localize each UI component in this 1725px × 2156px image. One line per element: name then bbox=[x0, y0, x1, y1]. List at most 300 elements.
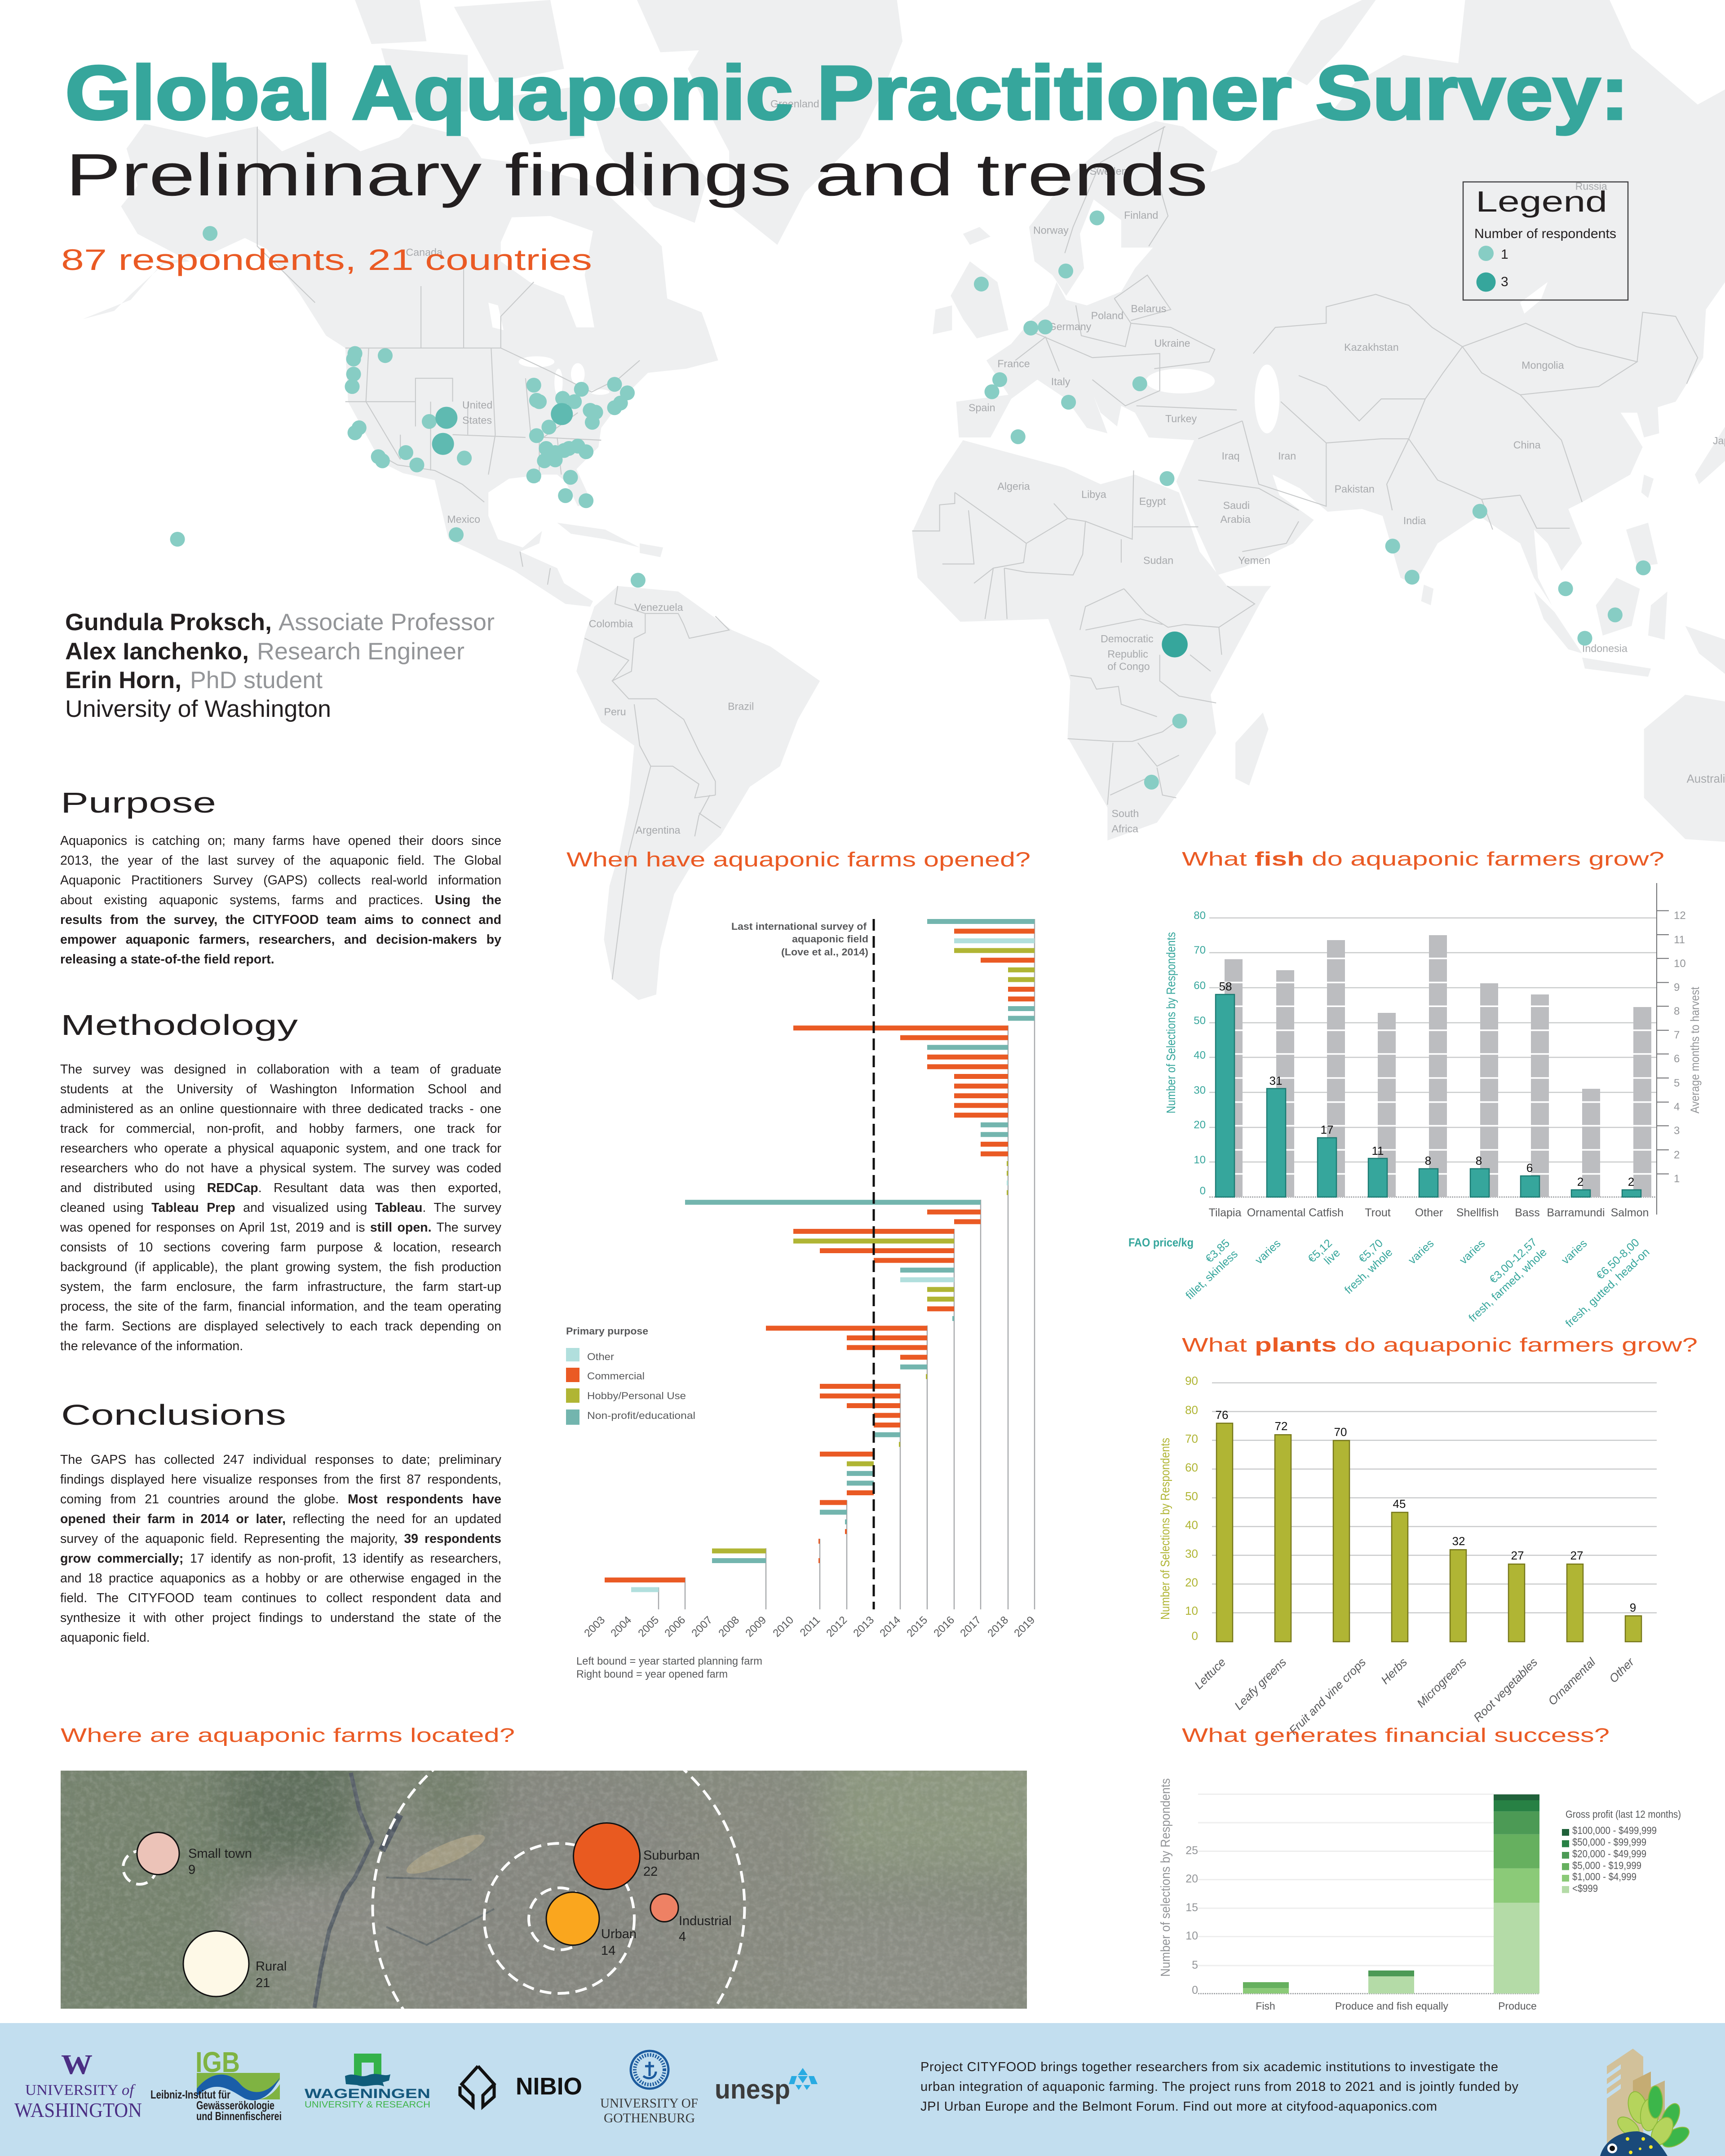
y axis: 90 bbox=[1185, 1374, 1198, 1387]
FAO price labels: fresh, whole bbox=[1342, 1246, 1395, 1296]
heading: purpose: Purpose bbox=[61, 786, 216, 819]
country borders bbox=[257, 127, 1698, 979]
year axis labels: 2016 bbox=[931, 1614, 957, 1639]
project description bbox=[920, 2060, 1518, 2114]
heading: conclusions: Conclusions bbox=[61, 1399, 286, 1431]
species labels: Trout bbox=[1365, 1206, 1391, 1219]
text block: methodology: the relevance of the information. bbox=[60, 1339, 243, 1353]
footer band bbox=[0, 2023, 1725, 2156]
text block: conclusions: findings displayed here visualize responses from the first 87 respondents, bbox=[60, 1472, 501, 1487]
profit legend bbox=[1562, 1808, 1681, 1894]
year axis labels: 2009 bbox=[743, 1614, 769, 1639]
right axis: 10 bbox=[1674, 958, 1686, 970]
map legend bbox=[1463, 182, 1628, 300]
project description: JPI Urban Europe and the Belmont Forum. Find out more at cityfood-aquaponics.com bbox=[920, 2099, 1437, 2114]
project description: urban integration of aquaponic farming. The project runs from 2018 to 2021 and is jointly funded by bbox=[920, 2080, 1518, 2094]
y axis: 10 bbox=[1185, 1930, 1198, 1942]
timeline legend: Primary purpose bbox=[566, 1325, 648, 1337]
profit legend: Gross profit (last 12 months) bbox=[1566, 1808, 1681, 1820]
logo: Wageningen bbox=[305, 2054, 430, 2110]
produce bar bbox=[1494, 1794, 1539, 1993]
water bodies bbox=[488, 216, 1548, 433]
logo: NIBIO: NIBIO bbox=[516, 2073, 582, 2100]
year axis labels: 2013 bbox=[851, 1614, 876, 1639]
left axis: 40 bbox=[1194, 1049, 1206, 1061]
authors: Gundula Proksch, bbox=[65, 609, 272, 636]
text block: conclusions: coming from 21 countries around the globe. Most respondents have bbox=[60, 1492, 501, 1507]
year axis labels: 2019 bbox=[1012, 1614, 1037, 1639]
location labels: Suburban bbox=[643, 1848, 700, 1863]
country labels bbox=[406, 98, 1725, 836]
category labels bbox=[1256, 2000, 1537, 2012]
species labels: Salmon bbox=[1611, 1206, 1649, 1219]
category labels: Produce bbox=[1498, 2000, 1537, 2012]
country labels: Venezuela bbox=[634, 601, 683, 613]
respondent points, 1 respondent bbox=[170, 211, 1651, 790]
y axis: 40 bbox=[1185, 1518, 1198, 1532]
location labels: 4 bbox=[679, 1930, 686, 1944]
world map background bbox=[83, 0, 1725, 1000]
country labels: Canada bbox=[406, 247, 442, 258]
logo: University of Washington bbox=[14, 2050, 142, 2121]
profit legend: $5,000 - $19,999 bbox=[1572, 1860, 1641, 1871]
logo: unesp: unesp bbox=[715, 2074, 790, 2104]
species labels: Ornamental bbox=[1247, 1206, 1305, 1219]
land masses bbox=[83, 0, 1725, 1000]
plant count bars bbox=[1216, 1423, 1641, 1642]
text block: conclusions: field. The CITYFOOD team continues to collect respondent data and bbox=[60, 1591, 501, 1605]
heading: financial success: What generates financial success? bbox=[1182, 1724, 1610, 1746]
text block: methodology: researchers who do not have a physical system. The survey was coded bbox=[60, 1161, 501, 1175]
y axis: Number of Selections by Respondents bbox=[1158, 1438, 1172, 1620]
timeline note: Left bound = year started planning farm bbox=[576, 1655, 762, 1667]
right axis: 3 bbox=[1674, 1125, 1680, 1137]
dashed city rings bbox=[122, 1771, 746, 2009]
category labels: Produce and fish equally bbox=[1335, 2000, 1448, 2012]
heading: fish: What fish do aquaponic farmers grow? bbox=[1182, 848, 1664, 870]
left axis: 80 bbox=[1194, 910, 1206, 922]
country labels: Poland bbox=[1091, 309, 1123, 321]
location labels: 21 bbox=[256, 1976, 270, 1990]
right axis: 6 bbox=[1674, 1053, 1680, 1065]
grid lines bbox=[1198, 1794, 1539, 1966]
year axis labels: 2004 bbox=[608, 1614, 634, 1639]
respondent points, larger bbox=[432, 403, 573, 455]
authors: University of Washington bbox=[65, 696, 331, 722]
text block: purpose: releasing a state-of-the field report. bbox=[60, 952, 274, 967]
FAO price labels: live bbox=[1322, 1246, 1343, 1267]
bar values: 9 bbox=[1630, 1601, 1636, 1614]
species labels: Other bbox=[1415, 1206, 1443, 1219]
right axis: Average months to harvest bbox=[1688, 987, 1702, 1113]
FAO price labels: €3,85 bbox=[1203, 1237, 1232, 1265]
right axis: 4 bbox=[1674, 1101, 1680, 1113]
left axis: 10 bbox=[1194, 1154, 1206, 1166]
country labels: Arabia bbox=[1220, 513, 1251, 525]
text block: purpose bbox=[60, 831, 501, 969]
map legend: 1 bbox=[1501, 247, 1508, 262]
plant labels: Root vegetables bbox=[1471, 1655, 1540, 1724]
FAO price labels: varies bbox=[1457, 1237, 1487, 1267]
bar values: 11 bbox=[1372, 1144, 1384, 1158]
plant labels: Ornamental bbox=[1545, 1655, 1598, 1708]
text block: methodology: background (if applicable), the plant growing system, the fish production bbox=[60, 1260, 501, 1274]
FAO price labels: €6,50-8,00 bbox=[1594, 1236, 1642, 1282]
country labels: Germany bbox=[1048, 321, 1092, 332]
right axis: 1 bbox=[1674, 1173, 1680, 1185]
y axis: Number of selections by Respondents bbox=[1159, 1778, 1173, 1977]
respondents summary: 87 respondents, 21 countries bbox=[61, 243, 592, 276]
profit legend: $100,000 - $499,999 bbox=[1572, 1825, 1657, 1836]
text block: purpose: results from the survey, the CITYFOOD team aims to connect and bbox=[60, 913, 501, 927]
financial chart bbox=[1159, 1778, 1681, 2012]
year axis labels: 2011 bbox=[798, 1614, 823, 1639]
text block: methodology: The survey was designed in collaboration with a team of graduate bbox=[60, 1062, 501, 1077]
location labels bbox=[188, 1847, 732, 1990]
logo: University of Washington: W bbox=[61, 2050, 93, 2080]
bar values: 2 bbox=[1577, 1175, 1583, 1188]
logo: IGB: Leibniz-Institut für bbox=[150, 2088, 230, 2101]
country labels: France bbox=[997, 358, 1030, 370]
map legend: 3 bbox=[1501, 274, 1508, 289]
right axis: 2 bbox=[1674, 1149, 1680, 1161]
location labels: Industrial bbox=[679, 1914, 732, 1928]
timeline legend: Commercial bbox=[587, 1370, 645, 1382]
plant labels: Microgreens bbox=[1414, 1655, 1469, 1710]
grid lines bbox=[1209, 918, 1657, 1162]
bar values: 45 bbox=[1393, 1497, 1406, 1511]
FAO price labels: €5,70 bbox=[1356, 1237, 1385, 1265]
text block: conclusions: survey of the aquaponic field. Representing the majority, 39 respondents bbox=[60, 1532, 501, 1546]
timeline legend bbox=[566, 1325, 695, 1425]
text block: conclusions: aquaponic field. bbox=[60, 1630, 150, 1645]
plant labels: Lettuce bbox=[1192, 1655, 1228, 1692]
logo: IGB bbox=[150, 2046, 282, 2123]
y axis bbox=[1158, 1374, 1198, 1643]
FAO price labels: FAO price/kg bbox=[1128, 1236, 1194, 1249]
left axis: 20 bbox=[1194, 1119, 1206, 1131]
country labels: United bbox=[462, 399, 492, 411]
country labels: South bbox=[1111, 808, 1139, 819]
location labels: Urban bbox=[601, 1927, 637, 1941]
country labels: States bbox=[462, 414, 492, 426]
location labels: 9 bbox=[188, 1863, 195, 1877]
plant labels bbox=[1192, 1655, 1637, 1737]
bar values: 31 bbox=[1269, 1074, 1282, 1087]
text block: purpose: 2013, the year of the last survey of the aquaponic field. The Global bbox=[60, 853, 501, 868]
timeline legend: Other bbox=[587, 1351, 614, 1362]
text block: conclusions: The GAPS has collected 247 individual responses to date; preliminary bbox=[60, 1453, 501, 1467]
text block: methodology: and distributed using REDCap. Resultant data was then exported, bbox=[60, 1181, 501, 1195]
bar values: 27 bbox=[1570, 1549, 1583, 1562]
left axis: 70 bbox=[1194, 944, 1206, 956]
logo: CITYFOOD fish and buildings bbox=[1600, 2049, 1692, 2156]
produce and fish bar bbox=[1368, 1970, 1414, 1993]
grid lines bbox=[1212, 1383, 1657, 1613]
location labels: 22 bbox=[643, 1864, 658, 1879]
authors bbox=[65, 609, 495, 722]
left axis: 30 bbox=[1194, 1084, 1206, 1096]
text block: purpose: empower aquaponic farmers, researchers, and decision-makers by bbox=[60, 932, 501, 947]
timeline bars bbox=[605, 919, 1035, 1592]
country labels: Colombia bbox=[589, 618, 633, 629]
bar values: 72 bbox=[1275, 1419, 1287, 1433]
bar values: 17 bbox=[1321, 1123, 1333, 1136]
logo: University of Gothenburg: GOTHENBURG bbox=[604, 2111, 695, 2125]
right axis: 9 bbox=[1674, 981, 1680, 994]
species labels: Shellfish bbox=[1456, 1206, 1499, 1219]
map legend: Number of respondents bbox=[1474, 226, 1616, 241]
left axis: Number of Selections by Respondents bbox=[1164, 932, 1178, 1113]
subtitle: Preliminary findings and trends bbox=[66, 142, 1208, 208]
country labels: Finland bbox=[1124, 209, 1158, 221]
country labels: Belarus bbox=[1131, 303, 1166, 314]
text block: conclusions: synthesize it with other project findings to understand the state of the bbox=[60, 1611, 501, 1625]
country labels: India bbox=[1403, 515, 1426, 526]
country labels: Brazil bbox=[728, 700, 754, 712]
FAO price labels: varies bbox=[1406, 1237, 1436, 1267]
FAO price labels: €3,00-12,57 bbox=[1487, 1236, 1539, 1286]
logo: University of Washington: UNIVERSITY of bbox=[25, 2082, 136, 2099]
year axis labels: 2007 bbox=[689, 1614, 715, 1639]
FAO price labels: varies bbox=[1253, 1237, 1283, 1267]
FAO price labels: fillet, skinless bbox=[1183, 1248, 1240, 1302]
y axis: 20 bbox=[1185, 1873, 1198, 1885]
y axis: 0 bbox=[1192, 1984, 1198, 1997]
project description: Project CITYFOOD brings together researchers from six academic institutions to investigate the bbox=[920, 2060, 1498, 2074]
right axis bbox=[1657, 883, 1702, 1215]
text block: methodology: researchers who operate a physical aquaponic system, and one track for bbox=[60, 1141, 501, 1156]
authors: Associate Professor bbox=[279, 609, 495, 636]
bar values bbox=[1216, 1408, 1636, 1614]
text block: methodology: consists of 10 sections covering farm purpose & location, research bbox=[60, 1240, 501, 1255]
text block: methodology: cleaned using Tableau Prep and visualized using Tableau. The survey bbox=[60, 1201, 501, 1215]
FAO price labels: varies bbox=[1559, 1237, 1589, 1267]
right axis: 11 bbox=[1674, 934, 1685, 946]
y axis: 10 bbox=[1185, 1604, 1198, 1617]
logo: NIBIO bbox=[460, 2066, 582, 2107]
authors: Erin Horn, bbox=[65, 667, 181, 694]
plants chart bbox=[1158, 1374, 1657, 1737]
profit legend: $50,000 - $99,999 bbox=[1572, 1836, 1646, 1848]
left axis bbox=[1164, 910, 1206, 1197]
right axis: 5 bbox=[1674, 1077, 1680, 1089]
country labels: Ukraine bbox=[1154, 337, 1190, 349]
year axis labels: 2012 bbox=[824, 1614, 849, 1639]
text block: conclusions bbox=[60, 1450, 501, 1648]
aerial map panel bbox=[61, 1771, 1027, 2009]
y axis: 20 bbox=[1185, 1576, 1198, 1589]
country labels: Sweden bbox=[1090, 165, 1128, 177]
survey annotation: Last international survey of bbox=[731, 921, 867, 932]
country labels: Kazakhstan bbox=[1344, 341, 1399, 353]
left axis: 0 bbox=[1200, 1185, 1206, 1197]
y axis bbox=[1159, 1778, 1198, 1997]
logo: University of Washington: WASHINGTON bbox=[14, 2099, 142, 2121]
right axis: 8 bbox=[1674, 1005, 1680, 1017]
species labels: Tilapia bbox=[1209, 1206, 1241, 1219]
profit legend: <$999 bbox=[1572, 1882, 1598, 1894]
logo: Wageningen: WAGENINGEN bbox=[305, 2086, 430, 2101]
bar values: 32 bbox=[1452, 1534, 1465, 1548]
country labels: Algeria bbox=[997, 480, 1030, 492]
country labels: China bbox=[1513, 439, 1541, 451]
country labels: Norway bbox=[1033, 225, 1069, 236]
timeline chart bbox=[566, 919, 1037, 1680]
location labels: Rural bbox=[256, 1959, 287, 1974]
bar values: 27 bbox=[1511, 1549, 1524, 1562]
authors: PhD student bbox=[190, 667, 323, 694]
species labels: Barramundi bbox=[1547, 1206, 1605, 1219]
heading: methodology: Methodology bbox=[61, 1009, 298, 1041]
text block: methodology: was opened for responses on April 1st, 2019 and is still open. The survey bbox=[60, 1220, 501, 1235]
logo: IGB: Gewässerökologie bbox=[196, 2099, 274, 2112]
survey annotation: aquaponic field bbox=[792, 933, 868, 945]
right axis: 12 bbox=[1674, 910, 1686, 922]
country labels: Russia bbox=[1575, 181, 1607, 192]
logo: IGB: und Binnenfischerei bbox=[196, 2109, 282, 2123]
bar values: 2 bbox=[1628, 1175, 1634, 1188]
harvest time bars bbox=[1225, 935, 1651, 1197]
text block: conclusions: opened their farm in 2014 or later, reflecting the need for an updated bbox=[60, 1512, 501, 1526]
y axis: 70 bbox=[1185, 1432, 1198, 1445]
2013 survey dashed line bbox=[872, 919, 875, 1609]
survey annotation bbox=[731, 921, 868, 958]
plant labels: Leafy greens bbox=[1232, 1655, 1289, 1713]
year axis labels: 2008 bbox=[716, 1614, 742, 1639]
plant labels: Other bbox=[1606, 1655, 1637, 1685]
country labels: Pakistan bbox=[1335, 483, 1375, 495]
year axis labels: 2003 bbox=[582, 1614, 607, 1639]
profit legend: $20,000 - $49,999 bbox=[1572, 1848, 1646, 1860]
FAO price labels bbox=[1128, 1236, 1652, 1330]
species labels: Catfish bbox=[1309, 1206, 1344, 1219]
location labels: Small town bbox=[188, 1847, 252, 1861]
logo: University of Gothenburg bbox=[600, 2051, 698, 2125]
bar values bbox=[1219, 980, 1634, 1188]
country labels: Argentina bbox=[636, 824, 681, 836]
year axis labels: 2018 bbox=[985, 1614, 1011, 1639]
fish bar bbox=[1243, 1982, 1289, 1993]
logo: unesp bbox=[715, 2068, 818, 2104]
bar values: 76 bbox=[1216, 1408, 1228, 1422]
country labels: Italy bbox=[1051, 376, 1070, 387]
species labels bbox=[1209, 1206, 1649, 1219]
text block: methodology bbox=[60, 1060, 501, 1356]
timeline legend: Non-profit/educational bbox=[587, 1410, 695, 1421]
country labels: Yemen bbox=[1238, 555, 1270, 566]
plant labels: Fruit and vine crops bbox=[1287, 1655, 1368, 1737]
text block: conclusions: and 18 practice aquaponics as a hobby or are otherwise engaged in the bbox=[60, 1571, 501, 1586]
heading: when opened: When have aquaponic farms opened? bbox=[566, 848, 1031, 871]
y axis: 0 bbox=[1192, 1629, 1198, 1643]
country labels: Africa bbox=[1111, 823, 1138, 835]
category labels: Fish bbox=[1256, 2000, 1275, 2012]
location bubbles bbox=[137, 1823, 678, 1997]
FAO price labels: €5,12 bbox=[1305, 1237, 1335, 1265]
y axis: 60 bbox=[1185, 1461, 1198, 1474]
location labels: 14 bbox=[601, 1944, 615, 1958]
logo: Wageningen: UNIVERSITY & RESEARCH bbox=[305, 2100, 430, 2110]
year axis labels: 2005 bbox=[636, 1614, 661, 1639]
text block: methodology: administered as an online questionnaire with three dedicated tracks - one bbox=[60, 1102, 501, 1116]
country labels: Iraq bbox=[1222, 450, 1240, 462]
bar values: 70 bbox=[1334, 1425, 1347, 1439]
timeline note: Right bound = year opened farm bbox=[576, 1668, 728, 1680]
year axis labels: 2017 bbox=[958, 1614, 983, 1639]
year axis labels: 2006 bbox=[662, 1614, 688, 1639]
left axis: 50 bbox=[1194, 1015, 1206, 1027]
country labels: Democratic bbox=[1101, 633, 1154, 645]
timeline note bbox=[576, 1655, 762, 1680]
text block: methodology: students at the University of Washington Information School and bbox=[60, 1082, 501, 1096]
aerial photo texture bbox=[61, 1771, 1027, 2009]
survey annotation: (Love et al., 2014) bbox=[781, 946, 868, 958]
title: Global Aquaponic Practitioner Survey: bbox=[65, 50, 1629, 136]
y axis: 30 bbox=[1185, 1547, 1198, 1560]
country labels: Iran bbox=[1278, 450, 1296, 462]
bar values: 58 bbox=[1219, 980, 1232, 993]
text block: conclusions: grow commercially; 17 identify as non-profit, 13 identify as researchers, bbox=[60, 1551, 501, 1566]
FAO price labels: fresh, gutted, head-on bbox=[1563, 1246, 1652, 1330]
y axis: 25 bbox=[1185, 1844, 1198, 1857]
country labels: Libya bbox=[1081, 489, 1106, 500]
country labels: Greenland bbox=[770, 98, 819, 110]
opening year lines bbox=[659, 919, 1035, 1609]
year axis labels: 2015 bbox=[904, 1614, 930, 1639]
text block: purpose: Aquaponics is catching on; many farms have opened their doors since bbox=[60, 834, 501, 848]
respondent point, 3 respondents bbox=[1162, 632, 1188, 658]
map legend: Legend bbox=[1476, 185, 1607, 218]
country labels: Turkey bbox=[1165, 413, 1197, 424]
species count bars bbox=[1216, 994, 1641, 1197]
logo: IGB: IGB bbox=[195, 2046, 240, 2078]
y axis: 15 bbox=[1185, 1901, 1198, 1914]
fish chart bbox=[1128, 883, 1702, 1330]
country labels: Peru bbox=[604, 706, 626, 717]
text block: purpose: Aquaponic Practitioners Survey (GAPS) collects real-world information bbox=[60, 873, 501, 888]
logo: University of Gothenburg: UNIVERSITY OF bbox=[600, 2096, 698, 2111]
text block: methodology: the farm. Sections are displayed selectively to each track depending on bbox=[60, 1319, 501, 1334]
left axis: 60 bbox=[1194, 980, 1206, 992]
country labels: Egypt bbox=[1139, 495, 1166, 507]
country labels: Mexico bbox=[447, 513, 480, 525]
country labels: Republic bbox=[1107, 648, 1148, 660]
year axis labels: 2010 bbox=[770, 1614, 796, 1639]
country labels: Mongolia bbox=[1522, 359, 1564, 371]
year axis labels: 2014 bbox=[877, 1614, 903, 1639]
country labels: of Congo bbox=[1107, 660, 1150, 672]
country labels: Spain bbox=[969, 402, 995, 414]
country labels: Indonesia bbox=[1582, 643, 1628, 654]
text block: methodology: system, the farm enclosure, the farm infrastructure, the farm start-up bbox=[60, 1280, 501, 1294]
heading: locations: Where are aquaponic farms located? bbox=[61, 1724, 515, 1746]
text block: methodology: process, the site of the farm, financial information, and the team operating bbox=[60, 1299, 501, 1314]
y axis: 80 bbox=[1185, 1403, 1198, 1417]
authors: Alex Ianchenko, bbox=[65, 638, 249, 665]
y axis: 50 bbox=[1185, 1489, 1198, 1503]
text block: methodology: track for commercial, non-profit, and hobby farmers, one track for bbox=[60, 1122, 501, 1136]
country labels: Saudi bbox=[1223, 499, 1250, 511]
timeline legend: Hobby/Personal Use bbox=[587, 1390, 686, 1401]
y axis: 5 bbox=[1192, 1959, 1198, 1971]
bar values: 8 bbox=[1425, 1154, 1431, 1167]
text block: purpose: about existing aquaponic systems, farms and practices. Using the bbox=[60, 893, 501, 907]
bar values: 8 bbox=[1476, 1154, 1482, 1167]
species labels: Bass bbox=[1515, 1206, 1540, 1219]
year axis labels bbox=[582, 1614, 1037, 1639]
profit legend: $1,000 - $4,999 bbox=[1572, 1871, 1637, 1882]
